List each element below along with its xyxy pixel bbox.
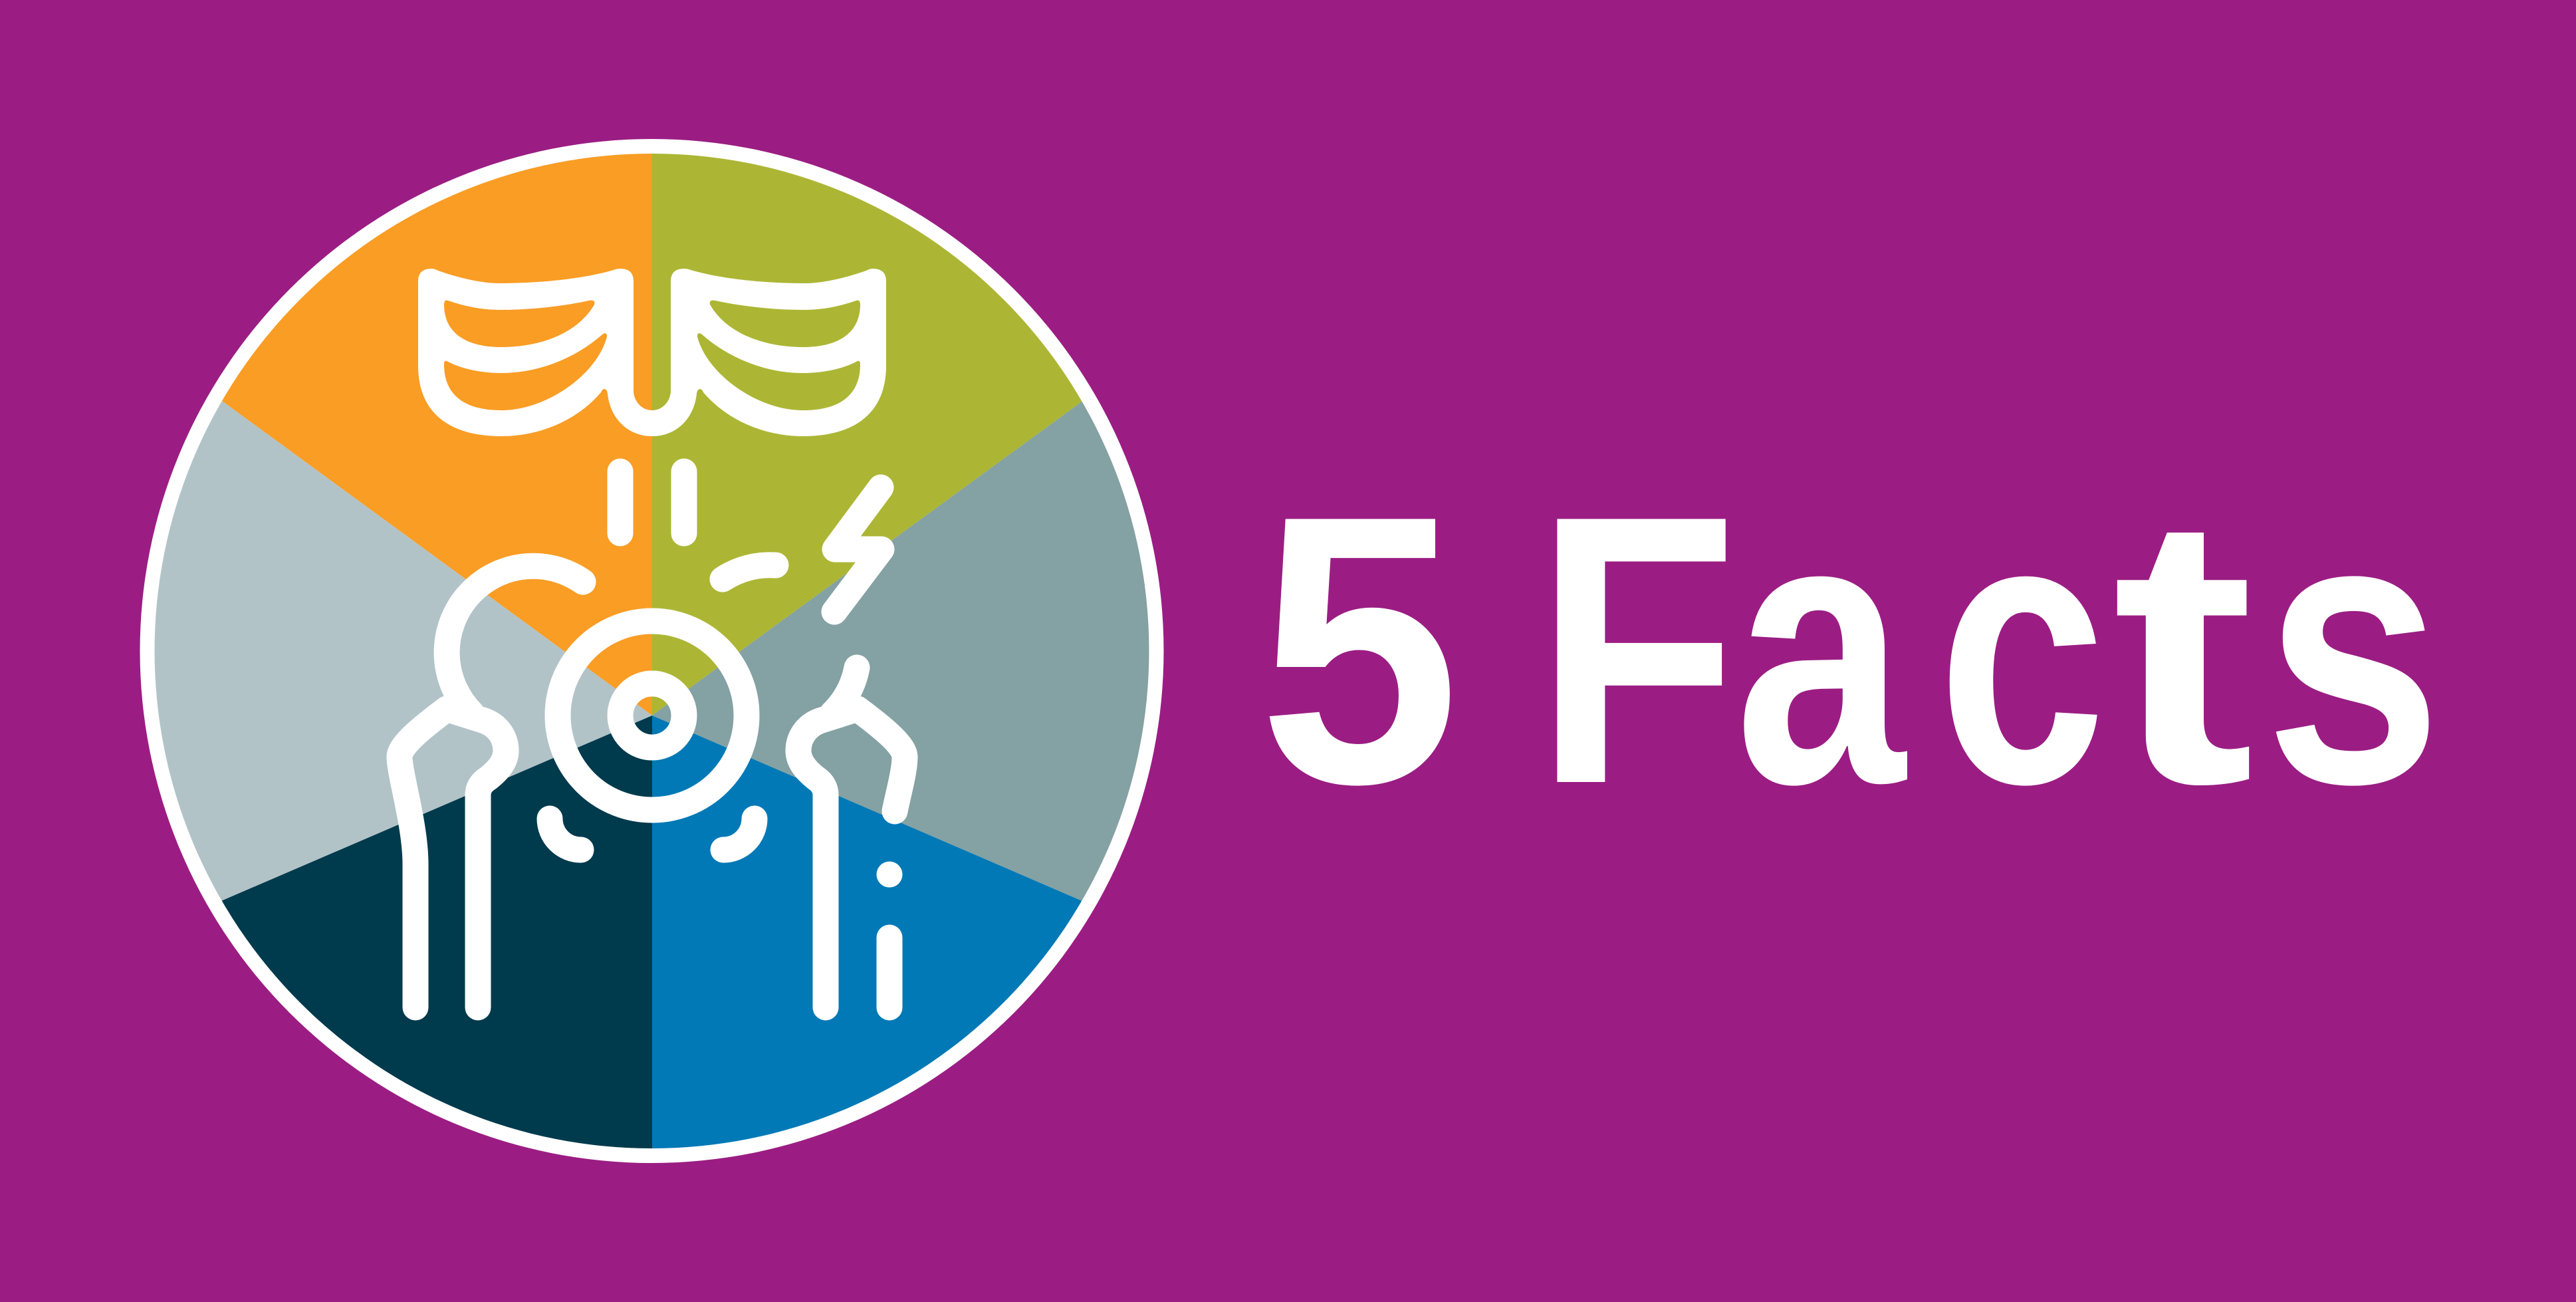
icon: left short bar	[608, 471, 633, 533]
icon: left person body	[400, 709, 506, 1007]
title: c	[1938, 436, 2106, 863]
circle emblem	[140, 139, 1163, 1163]
icon: lower right bar	[876, 938, 903, 1007]
icon: right person neck	[832, 668, 857, 714]
title: s	[2265, 436, 2442, 863]
icon: right person body	[798, 709, 905, 1007]
icon: left rib cage	[418, 269, 652, 436]
pie wheel with six coloured sectors	[154, 154, 1149, 1148]
title: F	[1535, 436, 1738, 863]
icon: right rib cage	[652, 269, 886, 436]
icon: small ring	[620, 684, 684, 747]
icon: right curved mark	[723, 819, 755, 850]
white circle border	[140, 139, 1163, 1163]
title: 5	[1258, 436, 1460, 863]
icon: left curved mark	[550, 819, 581, 850]
title: a	[1735, 436, 1907, 863]
icon: right person head	[723, 565, 776, 579]
icon: two people with x-ray strokes	[400, 471, 905, 1007]
icon: lightning bolt	[834, 487, 881, 612]
icon: dot	[876, 862, 903, 888]
icon: right short bar	[671, 471, 697, 533]
title: t	[2112, 436, 2254, 863]
icon: large ring	[558, 621, 747, 810]
icon: left person head	[447, 566, 583, 714]
